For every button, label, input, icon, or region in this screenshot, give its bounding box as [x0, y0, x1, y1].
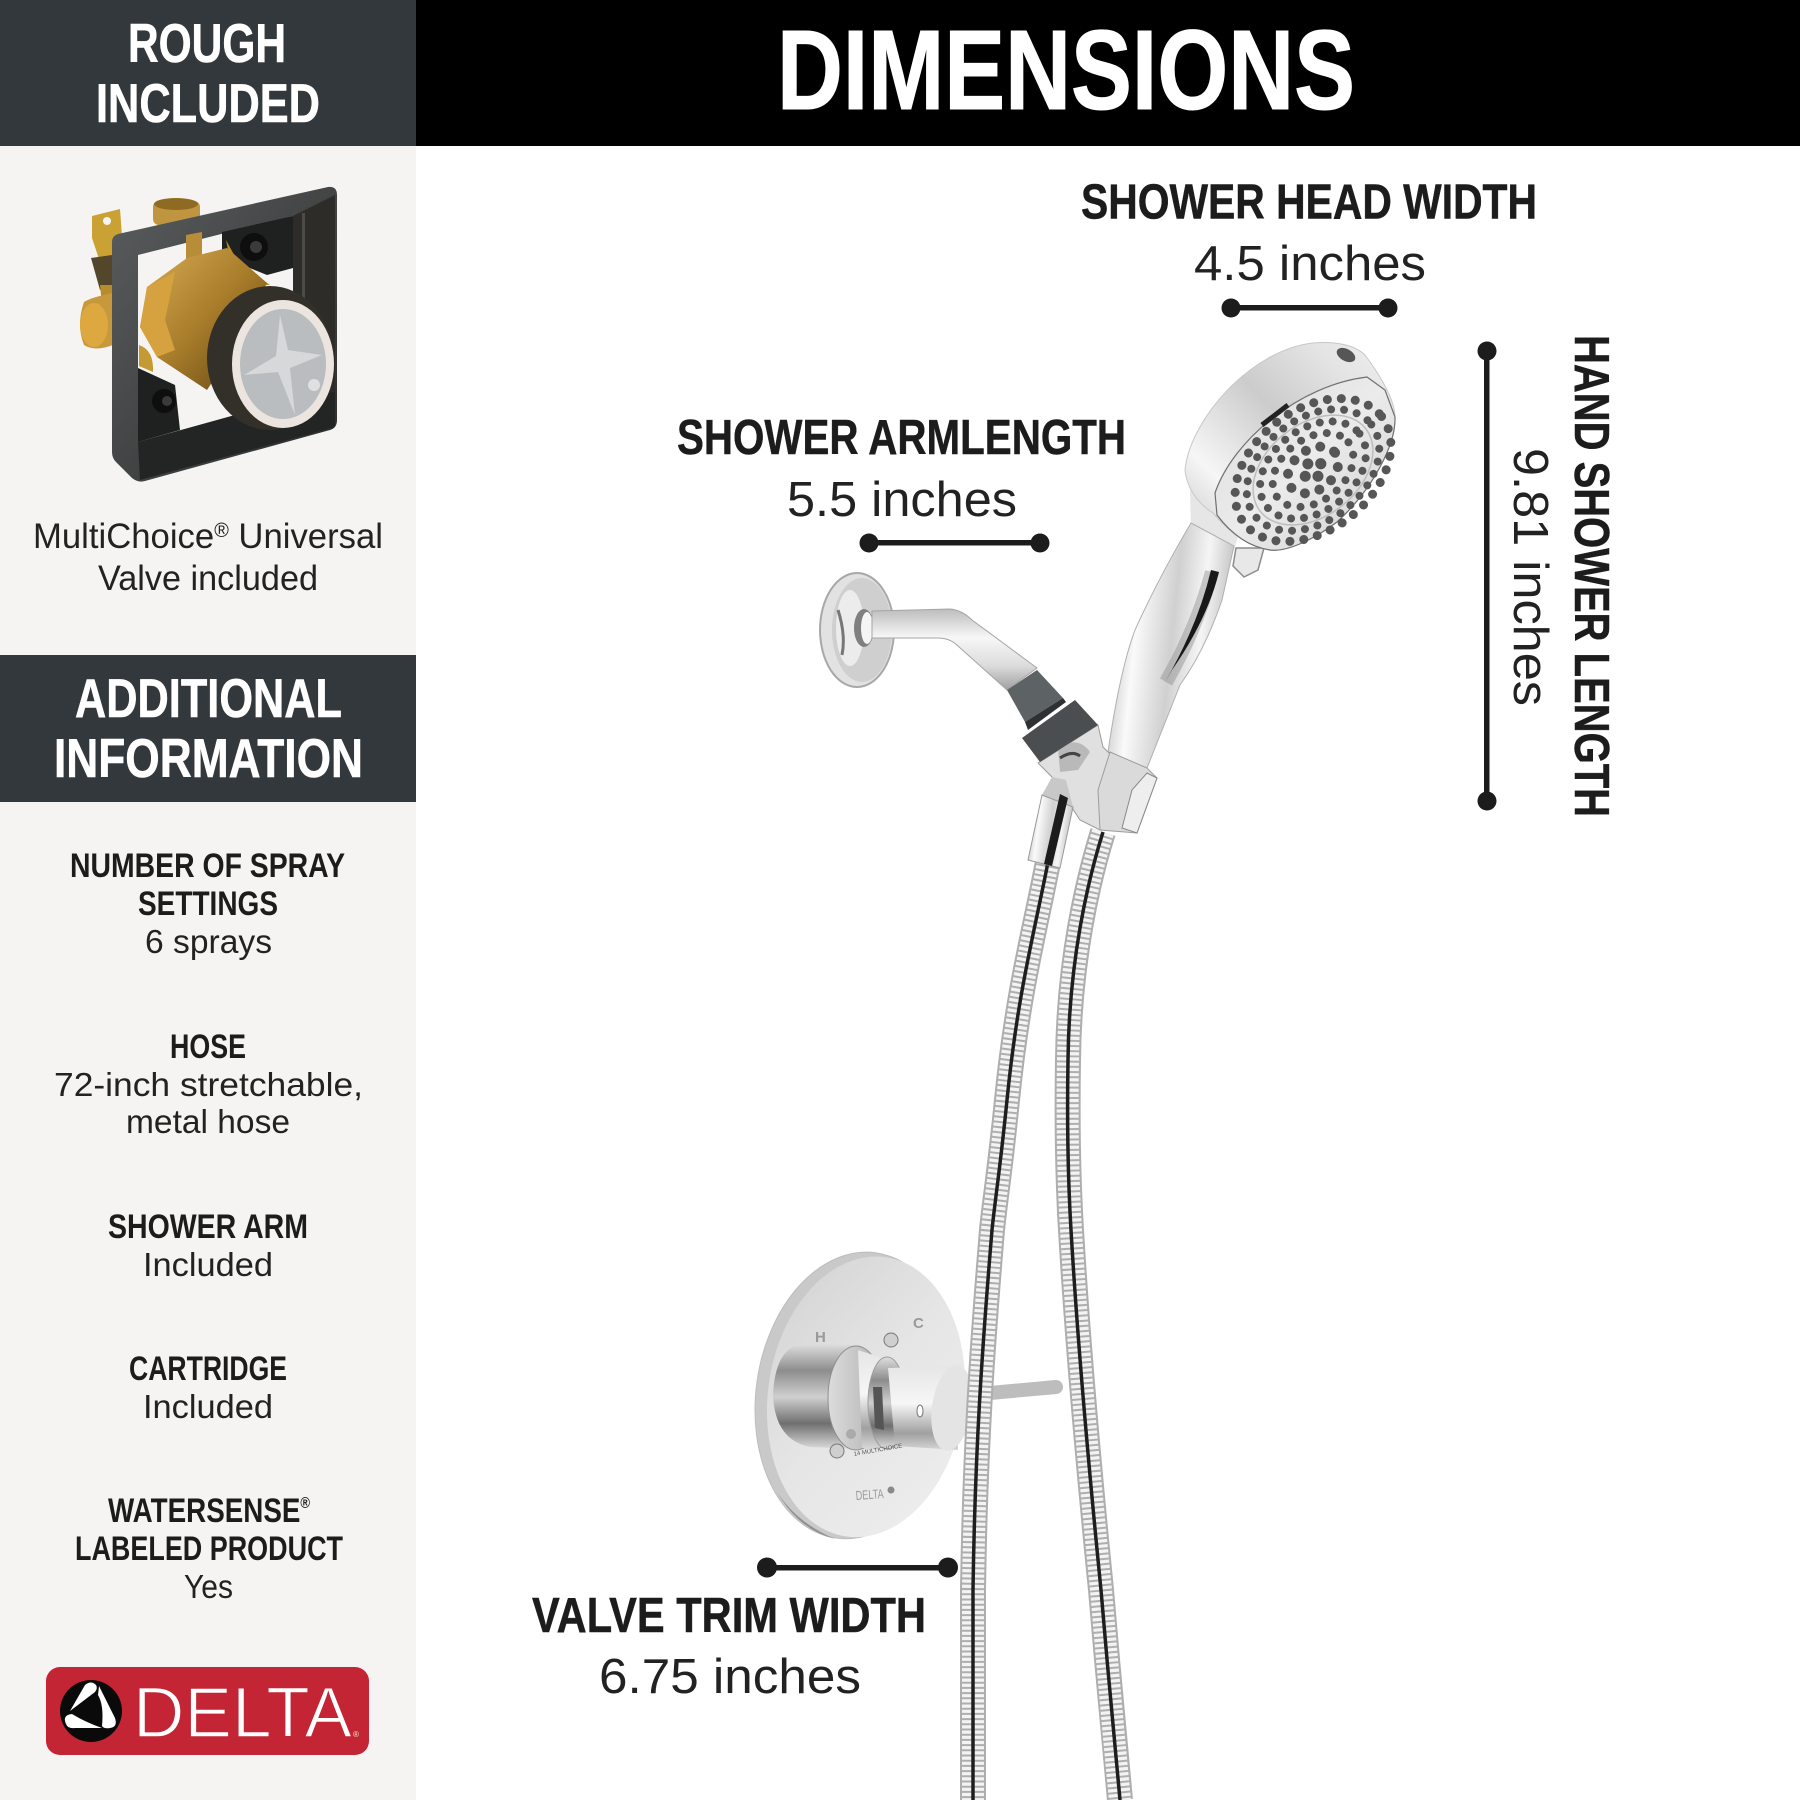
title banner: dimensions — [416, 0, 1800, 146]
heading: rough included: INCLUDED — [96, 72, 320, 134]
panel: sidebar — [0, 0, 416, 1800]
bar — [860, 534, 1050, 552]
spec: hose: metal hose — [126, 1103, 290, 1140]
spec: spray settings: NUMBER OF SPRAY — [70, 847, 345, 885]
dimension: valve trim width: VALVE TRIM WIDTH — [532, 1589, 926, 1643]
spec: watersense: ® — [300, 1495, 310, 1512]
product: shower head — [1185, 342, 1418, 571]
plate lettering: 14 MULTICHOICE — [853, 1444, 903, 1458]
bar — [757, 1558, 958, 1578]
heading: additional information — [0, 655, 416, 802]
product: shower arm — [820, 573, 1037, 690]
plate lettering — [815, 1315, 924, 1503]
caption: valve: ® — [214, 520, 229, 542]
product: valve trim — [737, 1239, 1056, 1553]
product: wall bracket — [1028, 725, 1157, 868]
caption: valve: Valve included — [98, 559, 318, 598]
spec: spray settings — [70, 847, 345, 960]
spec: watersense: LABELED PRODUCT — [75, 1530, 343, 1568]
dimension: hand shower length: HAND SHOWER LENGTH — [1564, 335, 1618, 817]
bar — [1478, 342, 1496, 810]
screws — [830, 1333, 898, 1458]
spec: cartridge: Included — [143, 1388, 273, 1425]
stop rod — [990, 1387, 1056, 1393]
spec: shower arm: Included — [143, 1246, 273, 1283]
heading: rough included — [0, 0, 416, 146]
product: hose right — [1068, 832, 1120, 1800]
spec: spray settings: SETTINGS — [138, 885, 278, 923]
plate lettering: C — [913, 1315, 924, 1332]
caption: valve: Universal — [229, 517, 383, 556]
dimension: shower arm length: 5.5 inches — [787, 473, 1017, 527]
dimension: shower head width — [1081, 176, 1537, 318]
dimension: shower arm length: SHOWER ARMLENGTH — [677, 411, 1126, 465]
image: rough-in valve — [80, 187, 337, 482]
spec: shower arm — [108, 1208, 308, 1283]
spec: hose: 72-inch stretchable, — [54, 1066, 363, 1103]
spec: cartridge — [129, 1350, 287, 1425]
spray face — [1208, 369, 1418, 571]
product: hand shower handle — [1108, 490, 1264, 768]
heading: additional information: ADDITIONAL — [75, 667, 342, 729]
dimension: valve trim width — [532, 1558, 958, 1704]
bar — [1222, 298, 1398, 318]
dimension: hand shower length: 9.81 inches — [1503, 448, 1557, 706]
spec: watersense: Yes — [184, 1568, 233, 1605]
spec: cartridge: CARTRIDGE — [129, 1350, 287, 1388]
dimension: shower head width: SHOWER HEAD WIDTH — [1081, 176, 1537, 230]
logo: delta: DELTA — [133, 1674, 353, 1753]
spec: watersense: WATERSENSE — [108, 1492, 344, 1530]
dimension: hand shower length — [1478, 335, 1618, 817]
spec: hose: HOSE — [170, 1028, 246, 1066]
dimension: shower head width: 4.5 inches — [1194, 237, 1426, 291]
title banner: dimensions: DIMENSIONS — [777, 7, 1355, 133]
plate lettering: H — [815, 1329, 826, 1346]
logo: delta: ® — [353, 1730, 359, 1739]
connector nuts — [1007, 670, 1098, 762]
heading: rough included: ROUGH — [128, 12, 286, 74]
caption: valve: MultiChoice — [33, 517, 216, 556]
logo: delta — [46, 1667, 369, 1755]
heading: additional information: INFORMATION — [54, 727, 363, 789]
spec: shower arm: SHOWER ARM — [108, 1208, 308, 1246]
dimension: valve trim width: 6.75 inches — [599, 1650, 861, 1704]
product: hose left — [973, 862, 1048, 1800]
spec: watersense — [75, 1492, 343, 1605]
spec: hose — [54, 1028, 363, 1140]
spec: spray settings: 6 sprays — [145, 923, 272, 960]
caption: valve — [33, 517, 383, 598]
dimension: shower arm length — [677, 411, 1126, 552]
plate lettering: DELTA — [855, 1486, 884, 1503]
